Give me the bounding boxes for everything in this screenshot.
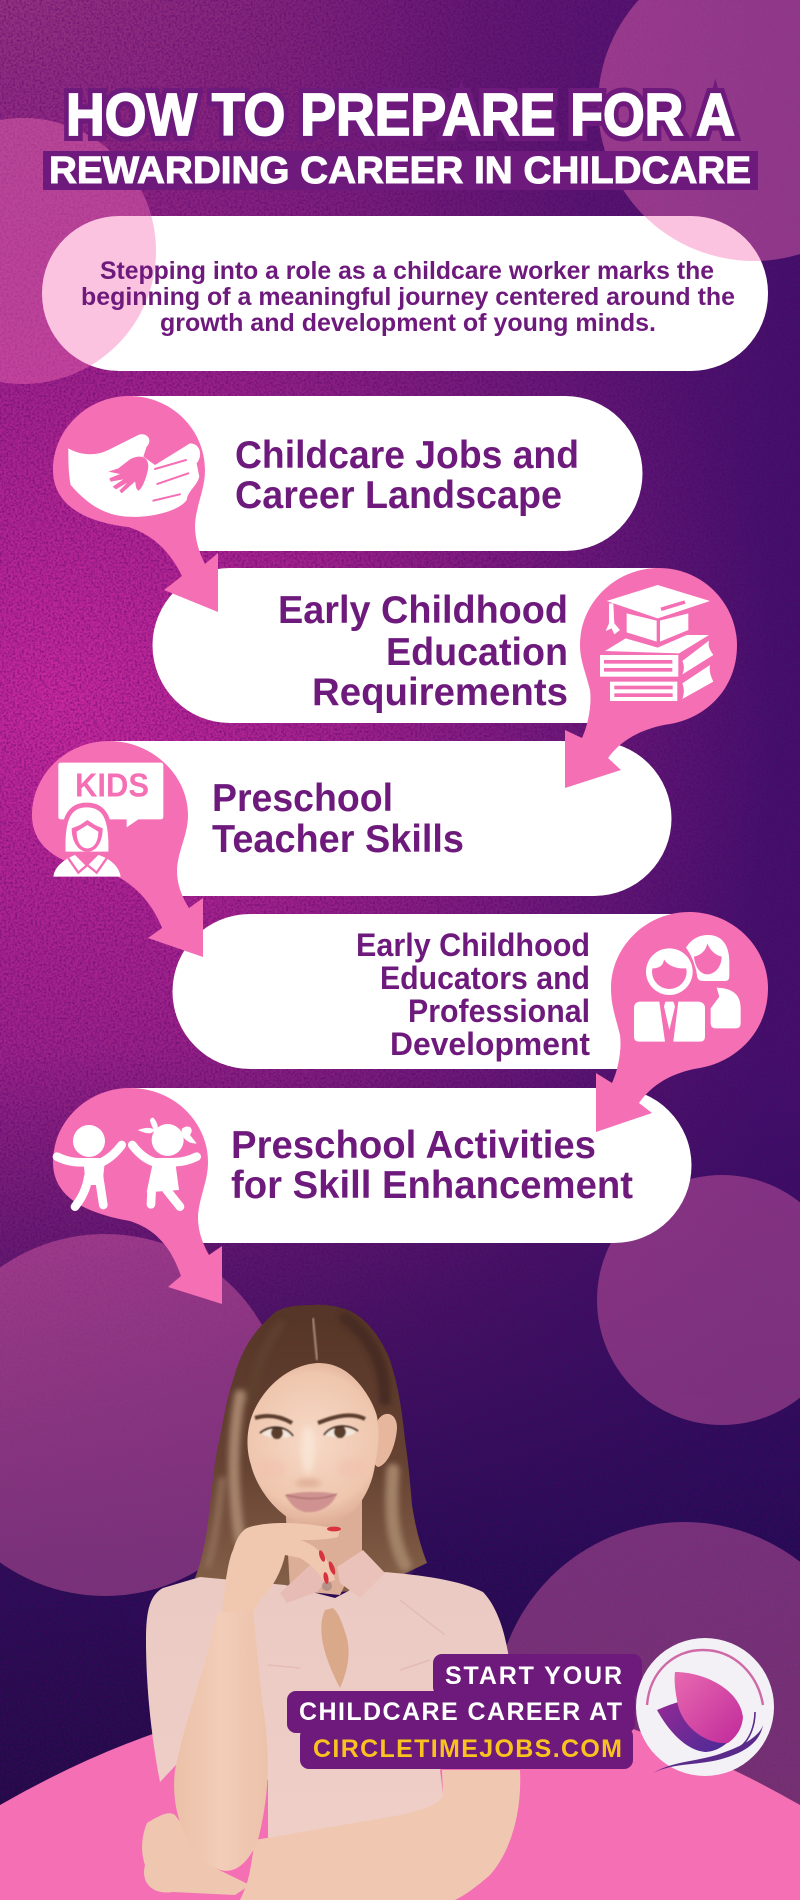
- red nails: [318, 1527, 341, 1584]
- step 3: bubble with teacher and KIDS speech icon: [32, 741, 203, 957]
- arms: [142, 1610, 520, 1900]
- white pills: [109, 396, 692, 1243]
- step 4: heading: Educators and: [380, 960, 590, 996]
- blouse: [146, 1550, 512, 1900]
- step 4: heading: Development: [390, 1026, 590, 1062]
- step 1: heading: [235, 434, 579, 517]
- step 4: bubble with educators icon: [596, 912, 768, 1132]
- title: HOW TO PREPARE FOR A: [66, 82, 735, 148]
- step 5: heading: [231, 1124, 633, 1207]
- call to action: CIRCLETIMEJOBS.COM: [313, 1735, 622, 1763]
- step 2: heading: [278, 589, 568, 714]
- step 2: heading: Education: [386, 631, 568, 674]
- panel: intro pill: growth and development of young minds.: [160, 309, 656, 337]
- step 5: bubble with children icon: [53, 1088, 222, 1304]
- call to action: CHILDCARE CAREER AT: [299, 1698, 622, 1726]
- panel: intro pill: beginning of a meaningful journey centered around the: [81, 283, 735, 311]
- title: HOW TO PREPARE FOR A: [66, 82, 735, 148]
- step 2: bubble with graduation cap and books icon: [565, 568, 737, 788]
- decorative circles: lower background: [0, 1175, 800, 1900]
- call to action: [287, 1654, 642, 1769]
- step 3: bubble with teacher and KIDS speech icon: KIDS: [75, 768, 149, 805]
- panel: intro pill: Stepping into a role as a childcare worker marks the: [100, 257, 714, 285]
- step 4: heading: [356, 927, 590, 1062]
- ear: [373, 1414, 397, 1467]
- photo: smiling woman with hand on chin: [142, 1305, 520, 1900]
- step 2: heading: Requirements: [312, 671, 568, 714]
- call to action: START YOUR: [445, 1662, 622, 1690]
- face: [247, 1363, 379, 1527]
- title: [43, 82, 758, 192]
- step 5: heading: Preschool Activities: [231, 1124, 596, 1167]
- step 3: heading: Preschool: [212, 777, 393, 820]
- step 1: heading: Career Landscape: [235, 474, 562, 517]
- step 5: heading: for Skill Enhancement: [231, 1164, 633, 1207]
- title: REWARDING CAREER IN CHILDCARE: [49, 150, 751, 192]
- hair: [195, 1305, 427, 1596]
- logo: [636, 1638, 774, 1776]
- step 1: heading: Childcare Jobs and: [235, 434, 579, 477]
- step 4: heading: Professional: [408, 993, 590, 1029]
- step 1: bubble with helping hands icon: [53, 396, 218, 612]
- panel: intro pill: [0, 0, 800, 384]
- step 2: heading: Early Childhood: [278, 589, 568, 632]
- step 3: heading: Teacher Skills: [212, 818, 464, 861]
- step 3: heading: [212, 777, 464, 861]
- raised hand: [222, 1523, 340, 1613]
- step 4: heading: Early Childhood: [356, 927, 590, 963]
- neck: [285, 1490, 362, 1595]
- pink ground shape: [0, 1690, 800, 1900]
